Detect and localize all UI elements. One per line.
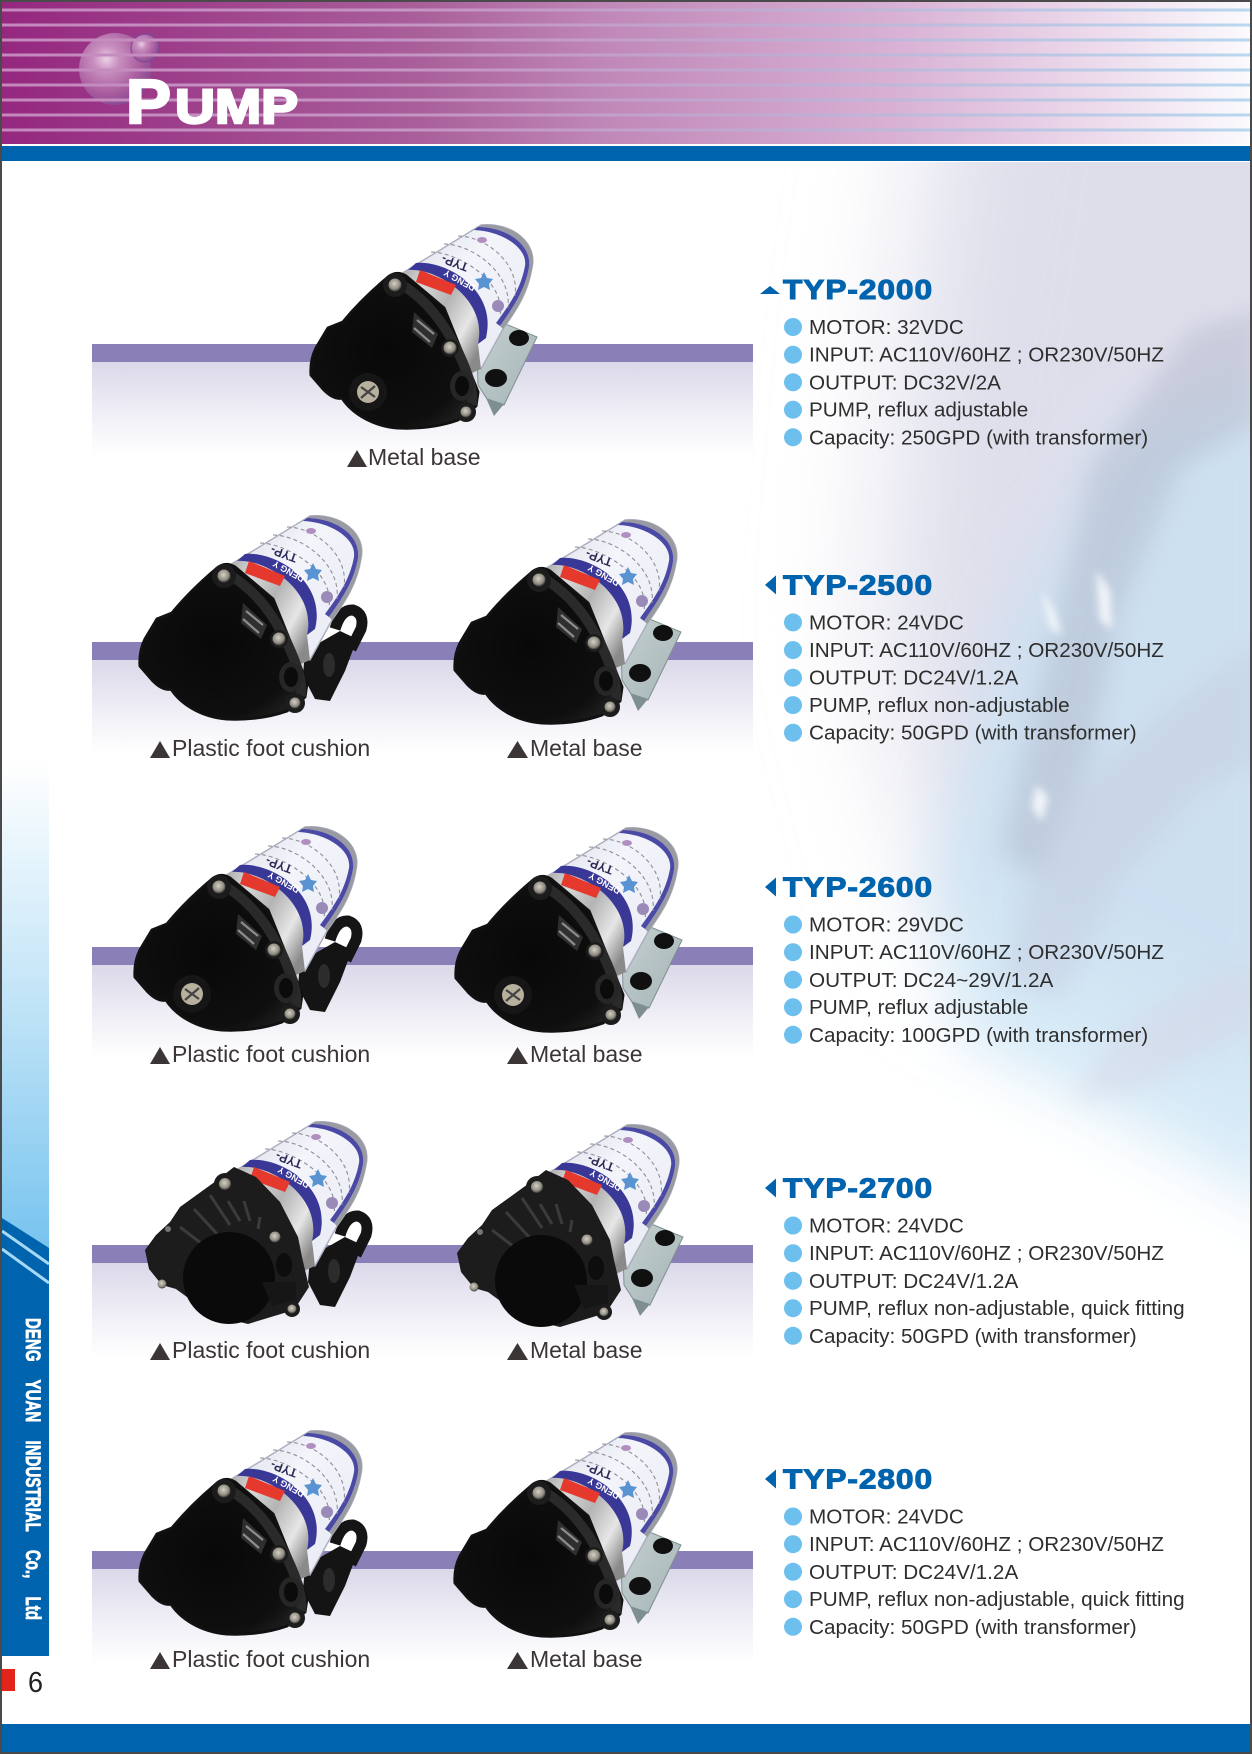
icon: bubbles: [79, 33, 159, 105]
spec list: PUMP, reflux adjustable: [809, 399, 1028, 422]
caption: metal base: Metal base: [368, 444, 481, 470]
caption: plastic foot cushion: Plastic foot cushion: [172, 1337, 370, 1363]
spec list: OUTPUT: DC24~29V/1.2A: [809, 969, 1054, 992]
pump photo: metal base: DENG Y: [586, 1476, 621, 1501]
spec list: [784, 1214, 1185, 1348]
pump photo: plastic foot cushion: DENG Y: [276, 1165, 311, 1190]
title: [126, 68, 298, 137]
header blue rule: [2, 146, 1250, 161]
spec list: PUMP, reflux non-adjustable, quick fitting: [809, 1297, 1185, 1320]
pump photo: metal base: TYP-: [584, 1460, 614, 1482]
pump photo: plastic foot cushion: [145, 1122, 367, 1324]
panel: TYP-2000 specs: [760, 274, 1164, 449]
panel: TYP-2500 pumps: [92, 516, 753, 761]
spec list: MOTOR: 24VDC: [809, 611, 964, 634]
pump photo: plastic foot cushion: DENG Y: [271, 1474, 306, 1499]
footer band: [2, 1724, 1250, 1752]
pump photo: plastic foot cushion: TYP-: [269, 543, 299, 565]
panel: TYP-2000 pumps: [92, 225, 753, 470]
panel: TYP-2700 pumps: [92, 1122, 753, 1363]
spec list: Capacity: 50GPD (with transformer): [809, 1616, 1137, 1639]
pump photo: metal base: [455, 1433, 681, 1636]
caption: metal base: Metal base: [530, 735, 643, 761]
pump photo: metal base: DENG Y: [586, 563, 621, 588]
spec list: [784, 1506, 1185, 1639]
spec list: Capacity: 250GPD (with transformer): [809, 426, 1148, 449]
pump photo: plastic foot cushion: TYP-: [274, 1149, 304, 1171]
pump photo: metal base: DENG Y: [588, 1168, 623, 1193]
spec list: PUMP, reflux non-adjustable, quick fitting: [809, 1588, 1185, 1611]
heading: TYP-2000: [783, 274, 933, 305]
pump photo: metal base: DENG Y: [587, 871, 622, 896]
backdrop band: [92, 344, 753, 456]
spec list: MOTOR: 24VDC: [809, 1506, 964, 1528]
backdrop band: [92, 1551, 753, 1663]
pump photo: metal base: [457, 1125, 683, 1327]
spec list: Capacity: 100GPD (with transformer): [809, 1024, 1148, 1047]
spec list: MOTOR: 32VDC: [809, 316, 964, 339]
panel: TYP-2800 specs: [765, 1464, 1185, 1639]
panel: TYP-2600 pumps: [92, 827, 753, 1067]
title: P: [126, 68, 171, 137]
panel: TYP-2500 specs: [765, 569, 1164, 745]
spec list: MOTOR: 29VDC: [809, 914, 964, 936]
spec list: [784, 914, 1164, 1047]
spec list: OUTPUT: DC24V/1.2A: [809, 1270, 1018, 1293]
pump photo: plastic foot cushion: [140, 1431, 362, 1634]
spec list: PUMP, reflux non-adjustable: [809, 694, 1070, 717]
pump photo: plastic foot cushion: DENG Y: [271, 559, 306, 584]
caption: metal base: Metal base: [530, 1041, 643, 1067]
caption: metal base: Metal base: [530, 1646, 643, 1672]
sidebar dark block: [2, 1218, 49, 1656]
spec list: Capacity: 50GPD (with transformer): [809, 722, 1137, 745]
spec list: Capacity: 50GPD (with transformer): [809, 1325, 1137, 1348]
page number: 6: [28, 1667, 43, 1699]
pump photo: metal base: DENG Y: [442, 268, 477, 293]
panel: side bar: [2, 760, 49, 1656]
pump photo: metal base: TYP-: [585, 855, 615, 877]
pump photo: metal base: TYP-: [586, 1152, 616, 1174]
panel: TYP-2800 pumps: [92, 1431, 753, 1672]
backdrop band: [92, 947, 753, 1059]
spec list: OUTPUT: DC32V/2A: [809, 371, 1001, 394]
heading: TYP-2500: [783, 569, 933, 600]
caption: plastic foot cushion: Plastic foot cushion: [172, 1041, 370, 1067]
pump photo: plastic foot cushion: TYP-: [264, 854, 294, 876]
spec list: INPUT: AC110V/60HZ ; OR230V/50HZ: [809, 1533, 1164, 1556]
sidebar company name: DENG YUAN INDUSTRIAL Co., Ltd: [21, 1318, 45, 1620]
heading: TYP-2600: [783, 872, 933, 902]
page number: [2, 1667, 43, 1699]
pump photo: plastic foot cushion: DENG Y: [266, 870, 301, 895]
spec list: MOTOR: 24VDC: [809, 1214, 964, 1238]
spec list: INPUT: AC110V/60HZ ; OR230V/50HZ: [809, 639, 1164, 662]
header stripes: [2, 10, 1250, 130]
header gradient: [2, 2, 1250, 144]
backdrop band: [92, 1245, 753, 1357]
heading: TYP-2700: [783, 1172, 933, 1204]
caption: metal base: Metal base: [530, 1337, 643, 1363]
spec list: INPUT: AC110V/60HZ ; OR230V/50HZ: [809, 344, 1164, 367]
heading: TYP-2800: [783, 1464, 933, 1494]
header band: [2, 2, 1250, 161]
spec list: [784, 611, 1164, 745]
pump photo: metal base: TYP-: [584, 547, 614, 569]
spec list: OUTPUT: DC24V/1.2A: [809, 667, 1018, 690]
spec list: [784, 316, 1164, 449]
pump photo: metal base: TYP-: [440, 252, 470, 274]
pump photo: metal base: [311, 225, 537, 428]
spec list: OUTPUT: DC24V/1.2A: [809, 1561, 1018, 1584]
pump photo: plastic foot cushion: [140, 516, 362, 719]
spec list: INPUT: AC110V/60HZ ; OR230V/50HZ: [809, 941, 1164, 964]
watery background texture: [880, 0, 1252, 1220]
sidebar light gradient: [2, 760, 49, 1260]
pump photo: plastic foot cushion: [135, 827, 357, 1030]
pump photo: plastic foot cushion: TYP-: [269, 1458, 299, 1480]
pump photo: metal base: [455, 520, 681, 723]
caption: plastic foot cushion: Plastic foot cushion: [172, 735, 370, 761]
panel: TYP-2700 specs: [765, 1172, 1185, 1348]
title: UMP: [175, 81, 298, 134]
panel: TYP-2600 specs: [765, 872, 1164, 1047]
sidebar diagonal stripes: [2, 1231, 49, 1283]
spec list: INPUT: AC110V/60HZ ; OR230V/50HZ: [809, 1242, 1164, 1265]
caption: plastic foot cushion: Plastic foot cushion: [172, 1646, 370, 1672]
spec list: PUMP, reflux adjustable: [809, 996, 1028, 1019]
backdrop band: [92, 642, 753, 754]
pump photo: metal base: [456, 828, 682, 1031]
